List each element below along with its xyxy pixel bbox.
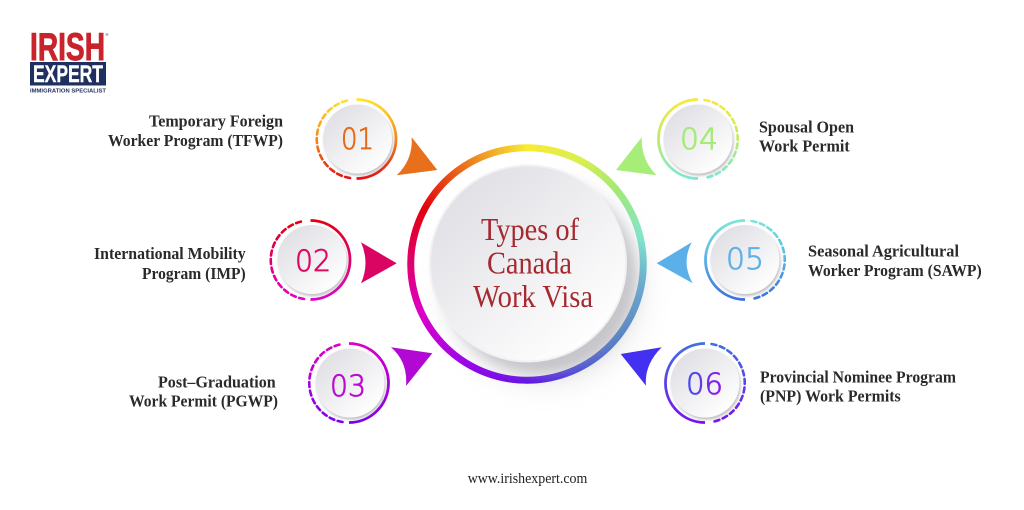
badge 05 — [706, 220, 785, 300]
label 06 — [760, 367, 956, 406]
badge 06 — [666, 344, 745, 422]
arrow 02 — [361, 242, 397, 283]
label 02 — [94, 244, 246, 283]
item 03 — [129, 344, 432, 422]
arrow 06 — [621, 347, 662, 386]
badge 01 — [317, 100, 396, 178]
badge 02 — [271, 220, 350, 300]
item 05 — [657, 220, 982, 300]
item 06 — [621, 344, 956, 422]
label 05: Worker Program (SAWP) — [808, 261, 982, 280]
item 01 — [108, 100, 437, 178]
central title: Canada — [487, 244, 572, 280]
label 03: Work Permit (PGWP) — [129, 392, 278, 411]
label 05: Seasonal Agricultural — [808, 242, 959, 261]
central title — [473, 211, 593, 314]
badge 06: 06 — [686, 367, 723, 401]
item 04 — [616, 100, 855, 178]
central title: Work Visa — [473, 278, 593, 314]
central circle with title — [430, 166, 644, 385]
gradient ring around central circle — [407, 144, 647, 384]
label 04: Work Permit — [759, 137, 850, 156]
badge 03 — [309, 344, 389, 422]
badge 02: 02 — [295, 244, 331, 278]
label 04: Spousal Open — [759, 118, 855, 137]
label 01: Temporary Foreign — [149, 112, 284, 131]
item 02 — [94, 220, 397, 300]
badge 03: 03 — [330, 369, 366, 403]
arrow 03 — [391, 347, 432, 386]
label 01: Worker Program (TFWP) — [108, 131, 283, 150]
label 04 — [759, 118, 855, 156]
badge 05: 05 — [726, 242, 764, 276]
label 01 — [108, 112, 284, 150]
central title: Types of — [481, 211, 579, 247]
label 02: International Mobility — [94, 244, 246, 263]
label 06: Provincial Nominee Program — [760, 367, 956, 386]
logo: Irish Expert: IMMIGRATION SPECIALIST — [30, 88, 107, 94]
label 02: Program (IMP) — [142, 264, 246, 283]
arrow 05 — [657, 242, 693, 283]
badge 01: 01 — [341, 122, 374, 156]
label 03: Post–Graduation — [158, 372, 276, 391]
logo: Irish Expert: IRISH — [30, 26, 105, 69]
badge 04 — [659, 100, 738, 178]
arrow 01 — [397, 137, 437, 175]
label 05 — [808, 242, 982, 280]
arrow 04 — [616, 137, 657, 175]
logo: Irish Expert: EXPERT — [33, 61, 103, 88]
logo: Irish Expert — [30, 26, 108, 94]
logo: Irish Expert: ® — [106, 32, 108, 37]
label 03 — [129, 372, 278, 411]
footer website: www.irishexpert.com — [468, 471, 588, 487]
badge 04: 04 — [680, 122, 718, 156]
label 06: (PNP) Work Permits — [760, 387, 901, 406]
